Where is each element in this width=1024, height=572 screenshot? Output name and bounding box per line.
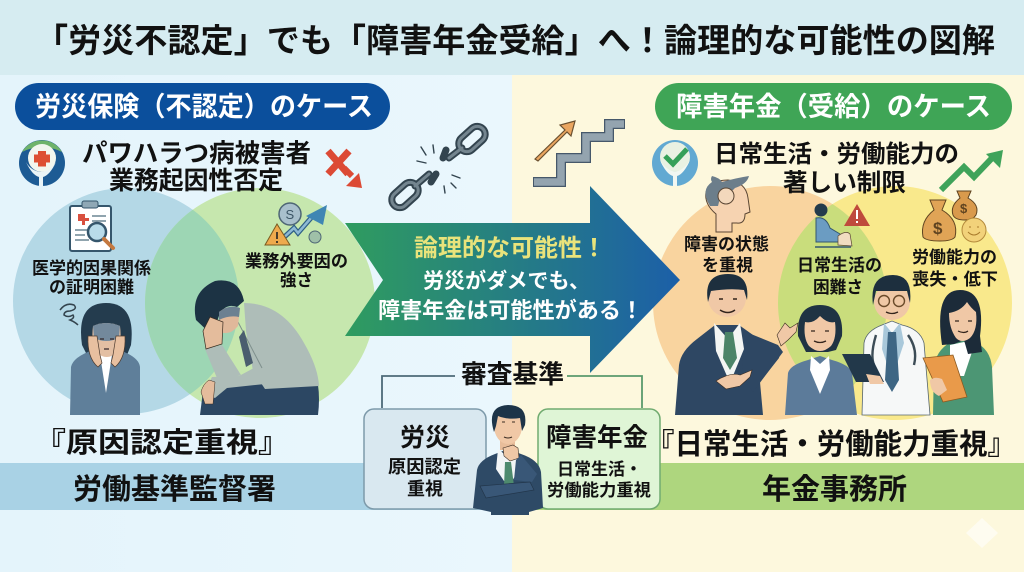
arrow text: 論理的な可能性！ xyxy=(414,235,606,262)
panel: pension criteria box: 日常生活・ xyxy=(557,460,642,479)
label: labor standards office: 労働基準監督署 xyxy=(73,473,276,506)
icon: money bags: $ xyxy=(933,219,943,238)
icon: money and warning xyxy=(265,203,327,245)
icon: head profile xyxy=(705,176,750,232)
panel: workers comp criteria box: 労災 xyxy=(400,424,450,452)
panel: right venn circles xyxy=(653,186,1012,420)
illustration: doctor xyxy=(842,275,930,415)
icon: stairs and arrow xyxy=(533,121,625,182)
heading: pension case: 障害年金（受給）のケース xyxy=(676,92,991,122)
label: medical causation: の証明困難 xyxy=(49,278,134,297)
big arrow xyxy=(345,186,680,373)
icon: hands with check xyxy=(652,140,698,186)
illustration: man in suit xyxy=(675,274,798,415)
icon: money bags xyxy=(922,191,986,242)
background: left half xyxy=(0,0,512,572)
panel: workers comp criteria box: 原因認定 xyxy=(388,457,461,477)
label: daily life difficulty xyxy=(797,256,882,297)
subtitle: right: 著しい制限 xyxy=(783,169,906,197)
icon: money and warning: S xyxy=(286,207,294,222)
title: 「労災不認定」でも「障害年金受給」へ！論理的な可能性の図解 xyxy=(35,22,995,59)
panel: workers comp criteria box xyxy=(364,409,486,509)
icon: hands with cross xyxy=(19,140,65,186)
heading: pension case xyxy=(655,83,1012,130)
background: right half xyxy=(512,0,1024,572)
label: non-work factors: 業務外要因の xyxy=(245,252,348,271)
label: non-work factors xyxy=(245,252,348,290)
illustration: woman in suit xyxy=(785,305,857,415)
label: medical causation xyxy=(32,258,151,297)
icon: red cross and arrow xyxy=(328,151,362,188)
label: review criteria xyxy=(382,361,642,408)
illustration: woman with folder xyxy=(923,290,994,415)
subtitle: left: パワハラつ病被害者 xyxy=(82,140,311,168)
panel: workers comp criteria box: 重視 xyxy=(407,479,443,499)
panel: pension criteria box: 障害年金 xyxy=(546,424,648,452)
label: daily life and work ability emphasis: 『日常生活・労働能力重視』 xyxy=(646,428,1016,461)
heading: workers comp case: 労災保険（不認定）のケース xyxy=(35,92,373,122)
panel: left venn circles xyxy=(13,188,375,418)
subtitle: left: 業務起因性否定 xyxy=(109,167,283,195)
label: disability state xyxy=(684,234,769,275)
subtitle: right: 日常生活・労働能力の xyxy=(714,141,959,168)
label: review criteria: 審査基準 xyxy=(461,361,564,389)
panel: pension criteria box: 労働能力重視 xyxy=(547,480,651,500)
arrow text xyxy=(378,235,643,323)
label: daily life difficulty: 困難さ xyxy=(813,278,863,297)
illustration: thinking man xyxy=(473,405,543,515)
arrow text: 障害年金は可能性がある！ xyxy=(378,298,643,323)
panel: bottom band left xyxy=(0,463,512,510)
icon: green rising arrow xyxy=(941,150,1003,190)
label: medical causation: 医学的因果関係 xyxy=(32,258,151,278)
label: loss of work capacity: 労働能力の xyxy=(912,247,997,267)
panel: pension criteria box xyxy=(538,409,660,509)
label: cause emphasis: 『原因認定重視』 xyxy=(34,427,290,458)
illustration: distressed woman xyxy=(60,303,140,415)
arrow text: 労災がダメでも、 xyxy=(423,269,590,293)
icon: seated person and warning xyxy=(814,204,870,247)
label: disability state: 障害の状態 xyxy=(684,234,769,254)
label: disability state: を重視 xyxy=(702,256,753,275)
icon: broken chain xyxy=(388,123,489,211)
illustration: distressed man xyxy=(195,280,319,415)
subtitle: right xyxy=(714,141,959,197)
title band xyxy=(0,0,1024,75)
icon: money bags: $ xyxy=(960,201,968,216)
heading: workers comp case xyxy=(15,83,390,130)
icon: faint sparkle xyxy=(966,518,998,548)
label: non-work factors: 強さ xyxy=(280,271,313,290)
subtitle: left xyxy=(82,140,311,195)
label: loss of work capacity: 喪失・低下 xyxy=(912,270,998,289)
icon: clipboard with magnifier xyxy=(70,201,113,251)
label: loss of work capacity xyxy=(912,247,998,289)
label: pension office: 年金事務所 xyxy=(762,473,907,506)
panel: bottom band right xyxy=(512,463,1024,510)
label: daily life difficulty: 日常生活の xyxy=(797,256,882,275)
